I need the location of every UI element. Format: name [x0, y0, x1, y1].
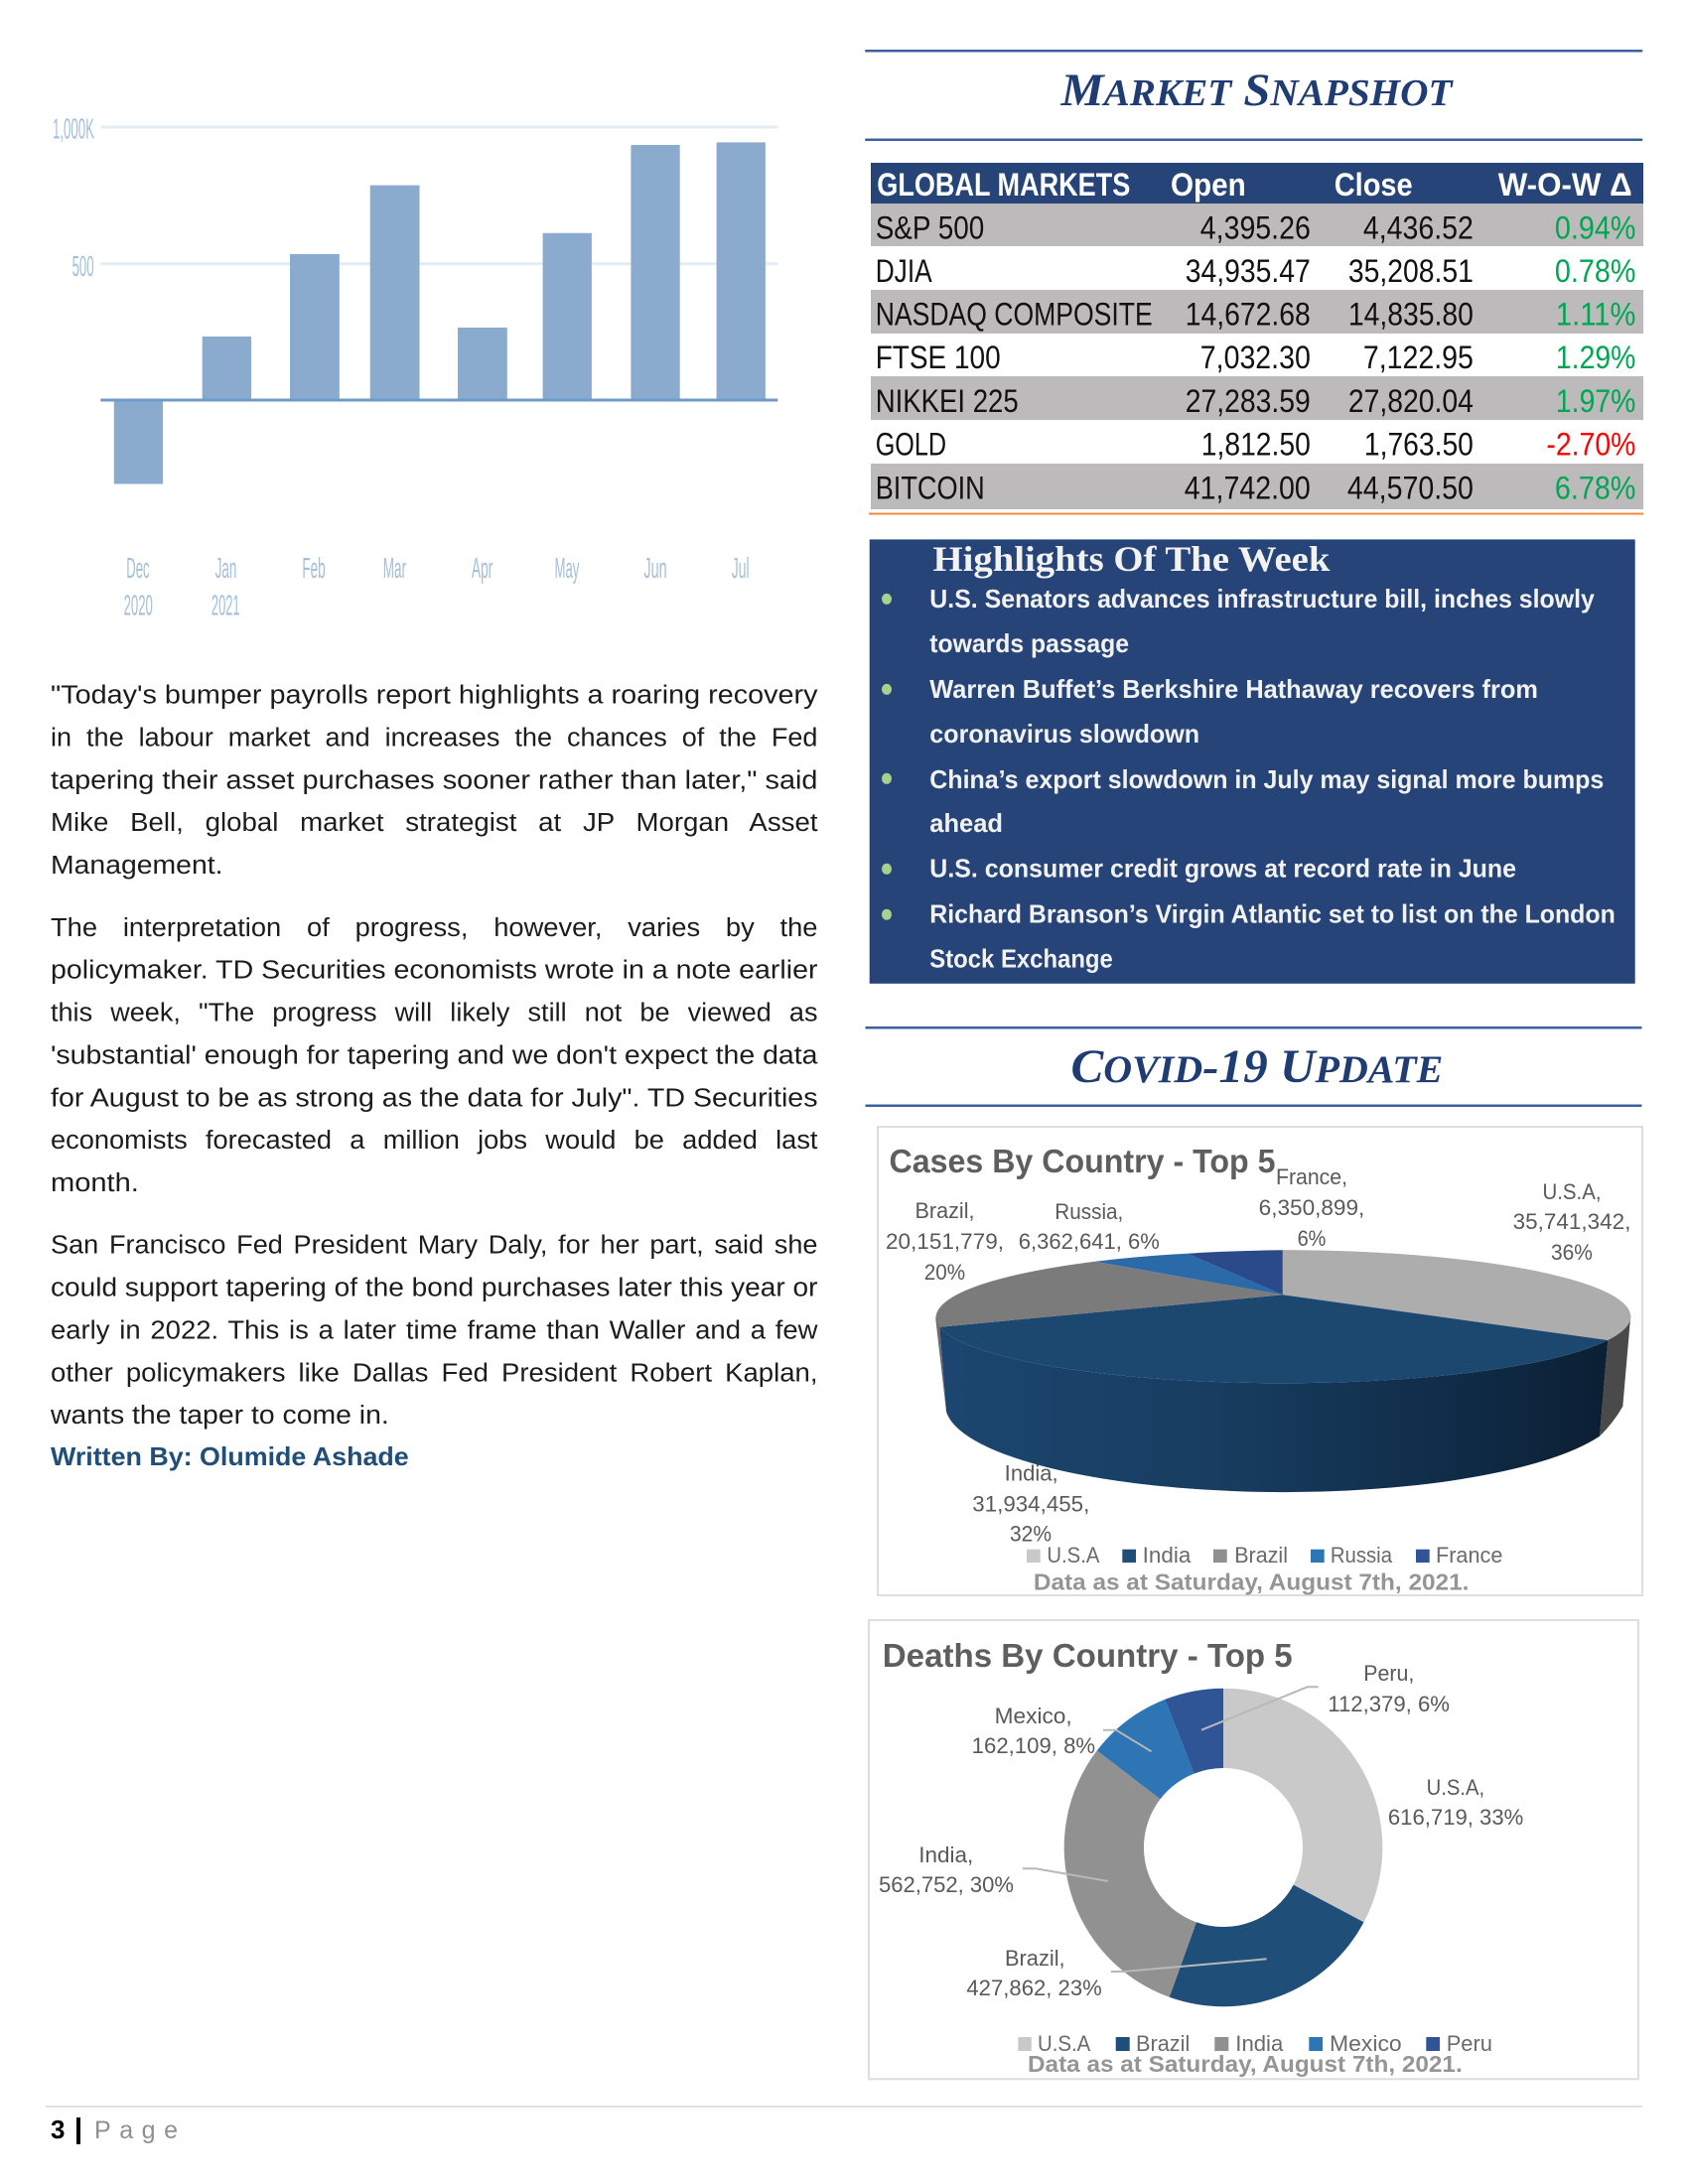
- article text: [50, 682, 818, 1471]
- row: NASDAQ: 14,672.68: [1186, 296, 1311, 332]
- paragraph 2: policymaker. TD Securities economists wrote in a note earlier: [51, 957, 818, 985]
- y axis labels: [53, 113, 94, 283]
- pie labels: India,: [1005, 1461, 1058, 1486]
- x axis labels: Jan: [215, 553, 236, 585]
- heading: market snapshot: MARKET SNAPSHOT: [1059, 65, 1454, 116]
- pie labels: 35,741,342,: [1513, 1209, 1630, 1234]
- table header: Close: [1335, 167, 1413, 203]
- legend: India: [1235, 2031, 1284, 2056]
- paragraph 2: The interpretation of progress, however, varies by the: [51, 914, 818, 942]
- row: FTSE 100: 7,122.95: [1363, 340, 1474, 375]
- footer: page number: [46, 2106, 1642, 2144]
- paragraph 1: "Today's bumper payrolls report highlights a roaring recovery: [51, 682, 818, 710]
- legend: [1027, 1543, 1502, 1568]
- pie labels: Brazil,: [915, 1198, 975, 1223]
- pie labels: 32%: [1010, 1522, 1052, 1547]
- row: DJIA: 34,935.47: [1186, 253, 1311, 289]
- x axis labels: May: [554, 553, 580, 585]
- row: NIKKEI 225: [871, 376, 1643, 420]
- paragraph 3: wants the taper to come in.: [50, 1402, 389, 1430]
- table header: GLOBAL MARKETS: [877, 167, 1130, 203]
- donut labels: [879, 1661, 1523, 2000]
- table header: [871, 163, 1643, 204]
- legend: Mexico: [1330, 2031, 1402, 2056]
- donut labels: Brazil,: [1005, 1946, 1065, 1971]
- x axis labels: Feb: [302, 553, 326, 585]
- heading: covid-19 update: COVID-19 UPDATE: [1070, 1040, 1443, 1093]
- bars: [114, 142, 766, 484]
- legend: France: [1436, 1543, 1502, 1568]
- row: GOLD: 1,763.50: [1364, 427, 1474, 463]
- pie labels: U.S.A,: [1543, 1179, 1601, 1204]
- footer: page number: 3: [51, 2115, 65, 2144]
- paragraph 3: San Francisco Fed President Mary Daly, for her part, said she: [51, 1232, 818, 1260]
- row: NIKKEI 225: 27,283.59: [1186, 383, 1311, 419]
- bullet 2: Warren Buffet’s Berkshire Hathaway recovers from: [929, 674, 1538, 704]
- pie labels: [886, 1164, 1630, 1547]
- row: GOLD: 1,812.50: [1201, 427, 1311, 463]
- row: S&P 500: S&P 500: [876, 210, 984, 246]
- row: S&P 500: 4,395.26: [1200, 210, 1311, 246]
- donut labels: 616,719, 33%: [1388, 1805, 1523, 1830]
- row: NASDAQ: NASDAQ COMPOSITE: [876, 296, 1153, 332]
- legend: [1018, 2031, 1492, 2056]
- chart title: Deaths By Country - Top 5: [883, 1637, 1293, 1674]
- bullet 1: U.S. Senators advances infrastructure bill, inches slowly: [929, 584, 1595, 614]
- x axis labels: Dec: [126, 553, 150, 585]
- row: GOLD: [876, 427, 1635, 463]
- row: DJIA: [876, 253, 1635, 289]
- paragraph 1: Management.: [51, 852, 222, 880]
- bullet 5: Stock Exchange: [929, 943, 1113, 973]
- row: BITCOIN: 6.78%: [1555, 471, 1635, 506]
- x axis labels: [124, 553, 750, 621]
- panel: deaths by country: [869, 1620, 1638, 2079]
- row: NIKKEI 225: 27,820.04: [1348, 383, 1474, 419]
- donut labels: 562,752, 30%: [879, 1872, 1014, 1897]
- pie labels: France,: [1276, 1164, 1347, 1189]
- bar chart: monthly payrolls: 500: [72, 251, 94, 283]
- data note: Data as at Saturday, August 7th, 2021.: [1034, 1569, 1469, 1594]
- paragraph 3: could support tapering of the bond purchases later this year or: [51, 1275, 818, 1302]
- legend: U.S.A: [1047, 1543, 1100, 1568]
- row: S&P 500: 0.94%: [1555, 210, 1635, 246]
- donut labels: 427,862, 23%: [966, 1976, 1102, 2000]
- table header: Open: [1171, 167, 1246, 203]
- row: BITCOIN: BITCOIN: [876, 471, 985, 506]
- row: BITCOIN: [871, 464, 1643, 509]
- leader lines: [1023, 1687, 1319, 1972]
- bullet 2: coronavirus slowdown: [929, 719, 1199, 749]
- pie labels: 6,350,899,: [1259, 1195, 1364, 1220]
- bullet 3: China’s export slowdown in July may signal more bumps: [929, 764, 1604, 794]
- donut labels: U.S.A,: [1427, 1775, 1484, 1800]
- row: GOLD: GOLD: [876, 427, 946, 463]
- paragraph 2: 'substantial' enough for tapering and we don't expect the data: [51, 1041, 818, 1069]
- highlights heading: Highlights Of The Week: [933, 539, 1330, 579]
- row: DJIA: 0.78%: [1555, 253, 1635, 289]
- row: NASDAQ: [871, 290, 1643, 334]
- bar chart: monthly payrolls: 1,000K: [53, 113, 94, 145]
- donut labels: India,: [918, 1843, 973, 1867]
- legend: Peru: [1447, 2031, 1492, 2056]
- row: NIKKEI 225: 1.97%: [1556, 383, 1635, 419]
- pie labels: Russia,: [1055, 1199, 1123, 1224]
- row: GOLD: -2.70%: [1546, 427, 1635, 463]
- x axis labels: 2020: [124, 590, 153, 621]
- row: DJIA: DJIA: [876, 253, 932, 289]
- pie labels: 31,934,455,: [972, 1492, 1089, 1517]
- paragraph 1: tapering their asset purchases sooner rather than later," said: [51, 766, 818, 794]
- row: BITCOIN: 44,570.50: [1347, 471, 1474, 506]
- row: DJIA: 35,208.51: [1348, 253, 1474, 289]
- donut labels: Peru,: [1363, 1661, 1414, 1686]
- paragraph 3: early in 2022. This is a later time frame than Waller and a few: [51, 1316, 818, 1344]
- paragraph 1: in the labour market and increases the chances of the Fed: [51, 725, 818, 752]
- donut labels: Mexico,: [995, 1704, 1072, 1728]
- legend: Brazil: [1136, 2031, 1190, 2056]
- row: FTSE 100: [876, 340, 1635, 375]
- x axis labels: 2021: [211, 590, 240, 621]
- 3d pie chart: [935, 1250, 1630, 1492]
- row: NASDAQ: 1.11%: [1556, 296, 1635, 332]
- paragraph 1: [51, 682, 818, 880]
- paragraph 2: economists forecasted a million jobs would be added last: [51, 1127, 818, 1155]
- paragraph 2: this week, "The progress will likely still not be viewed as: [51, 999, 818, 1026]
- donut chart: [1064, 1689, 1382, 2006]
- bullet 2: [882, 674, 1538, 749]
- bullet 3: [882, 764, 1604, 838]
- bullet 3: ahead: [929, 808, 1003, 838]
- paragraph 2: for August to be as strong as the data for July". TD Securities: [51, 1084, 818, 1112]
- paragraph 2: [51, 914, 818, 1197]
- row: FTSE 100: 7,032.30: [1200, 340, 1311, 375]
- pie labels: 20%: [924, 1260, 965, 1285]
- bullet 4: U.S. consumer credit grows at record rate in June: [929, 854, 1516, 884]
- row: S&P 500: [871, 204, 1643, 246]
- row: FTSE 100: 1.29%: [1556, 340, 1635, 375]
- panel: highlights of the week: [870, 539, 1635, 984]
- paragraph 3: other policymakers like Dallas Fed President Robert Kaplan,: [51, 1359, 818, 1387]
- panel: cases by country: [878, 1127, 1642, 1595]
- row: NASDAQ: 14,835.80: [1348, 296, 1474, 332]
- bullet 1: towards passage: [929, 628, 1129, 658]
- data note: Data as at Saturday, August 7th, 2021.: [1028, 2051, 1463, 2077]
- row: NIKKEI 225: NIKKEI 225: [876, 383, 1019, 419]
- pie labels: 6%: [1298, 1226, 1326, 1251]
- row: S&P 500: 4,436.52: [1363, 210, 1474, 246]
- bar chart: monthly payrolls: Jul: [732, 553, 750, 585]
- x axis labels: Apr: [472, 553, 492, 585]
- donut labels: 112,379, 6%: [1328, 1692, 1450, 1716]
- paragraph 1: Mike Bell, global market strategist at JP Morgan Asset: [51, 809, 817, 837]
- bullet 5: [882, 899, 1616, 973]
- chart title: Cases By Country - Top 5: [890, 1143, 1275, 1179]
- legend: Brazil: [1234, 1543, 1288, 1568]
- paragraph 3: [50, 1232, 818, 1430]
- pie labels: 20,151,779,: [886, 1229, 1004, 1254]
- x axis labels: Jun: [643, 553, 667, 585]
- bar chart: monthly payrolls: [53, 113, 777, 621]
- row: FTSE 100: FTSE 100: [876, 340, 1001, 375]
- byline: Written By: Olumide Ashade: [51, 1441, 409, 1471]
- footer: page number: Page: [94, 2116, 178, 2144]
- legend: Russia: [1331, 1543, 1393, 1568]
- row: BITCOIN: 41,742.00: [1185, 471, 1311, 506]
- legend: U.S.A: [1038, 2031, 1091, 2056]
- bullet 5: Richard Branson’s Virgin Atlantic set to list on the London: [929, 899, 1616, 929]
- donut labels: 162,109, 8%: [972, 1733, 1095, 1758]
- pie labels: 6,362,641, 6%: [1019, 1229, 1160, 1254]
- table: global markets: [869, 163, 1643, 514]
- x axis labels: Mar: [383, 553, 406, 585]
- pie labels: 36%: [1551, 1240, 1593, 1265]
- paragraph 2: month.: [51, 1169, 139, 1197]
- table header: W-O-W Δ: [1498, 167, 1632, 203]
- bullet 1: [882, 584, 1595, 658]
- legend: India: [1143, 1543, 1192, 1568]
